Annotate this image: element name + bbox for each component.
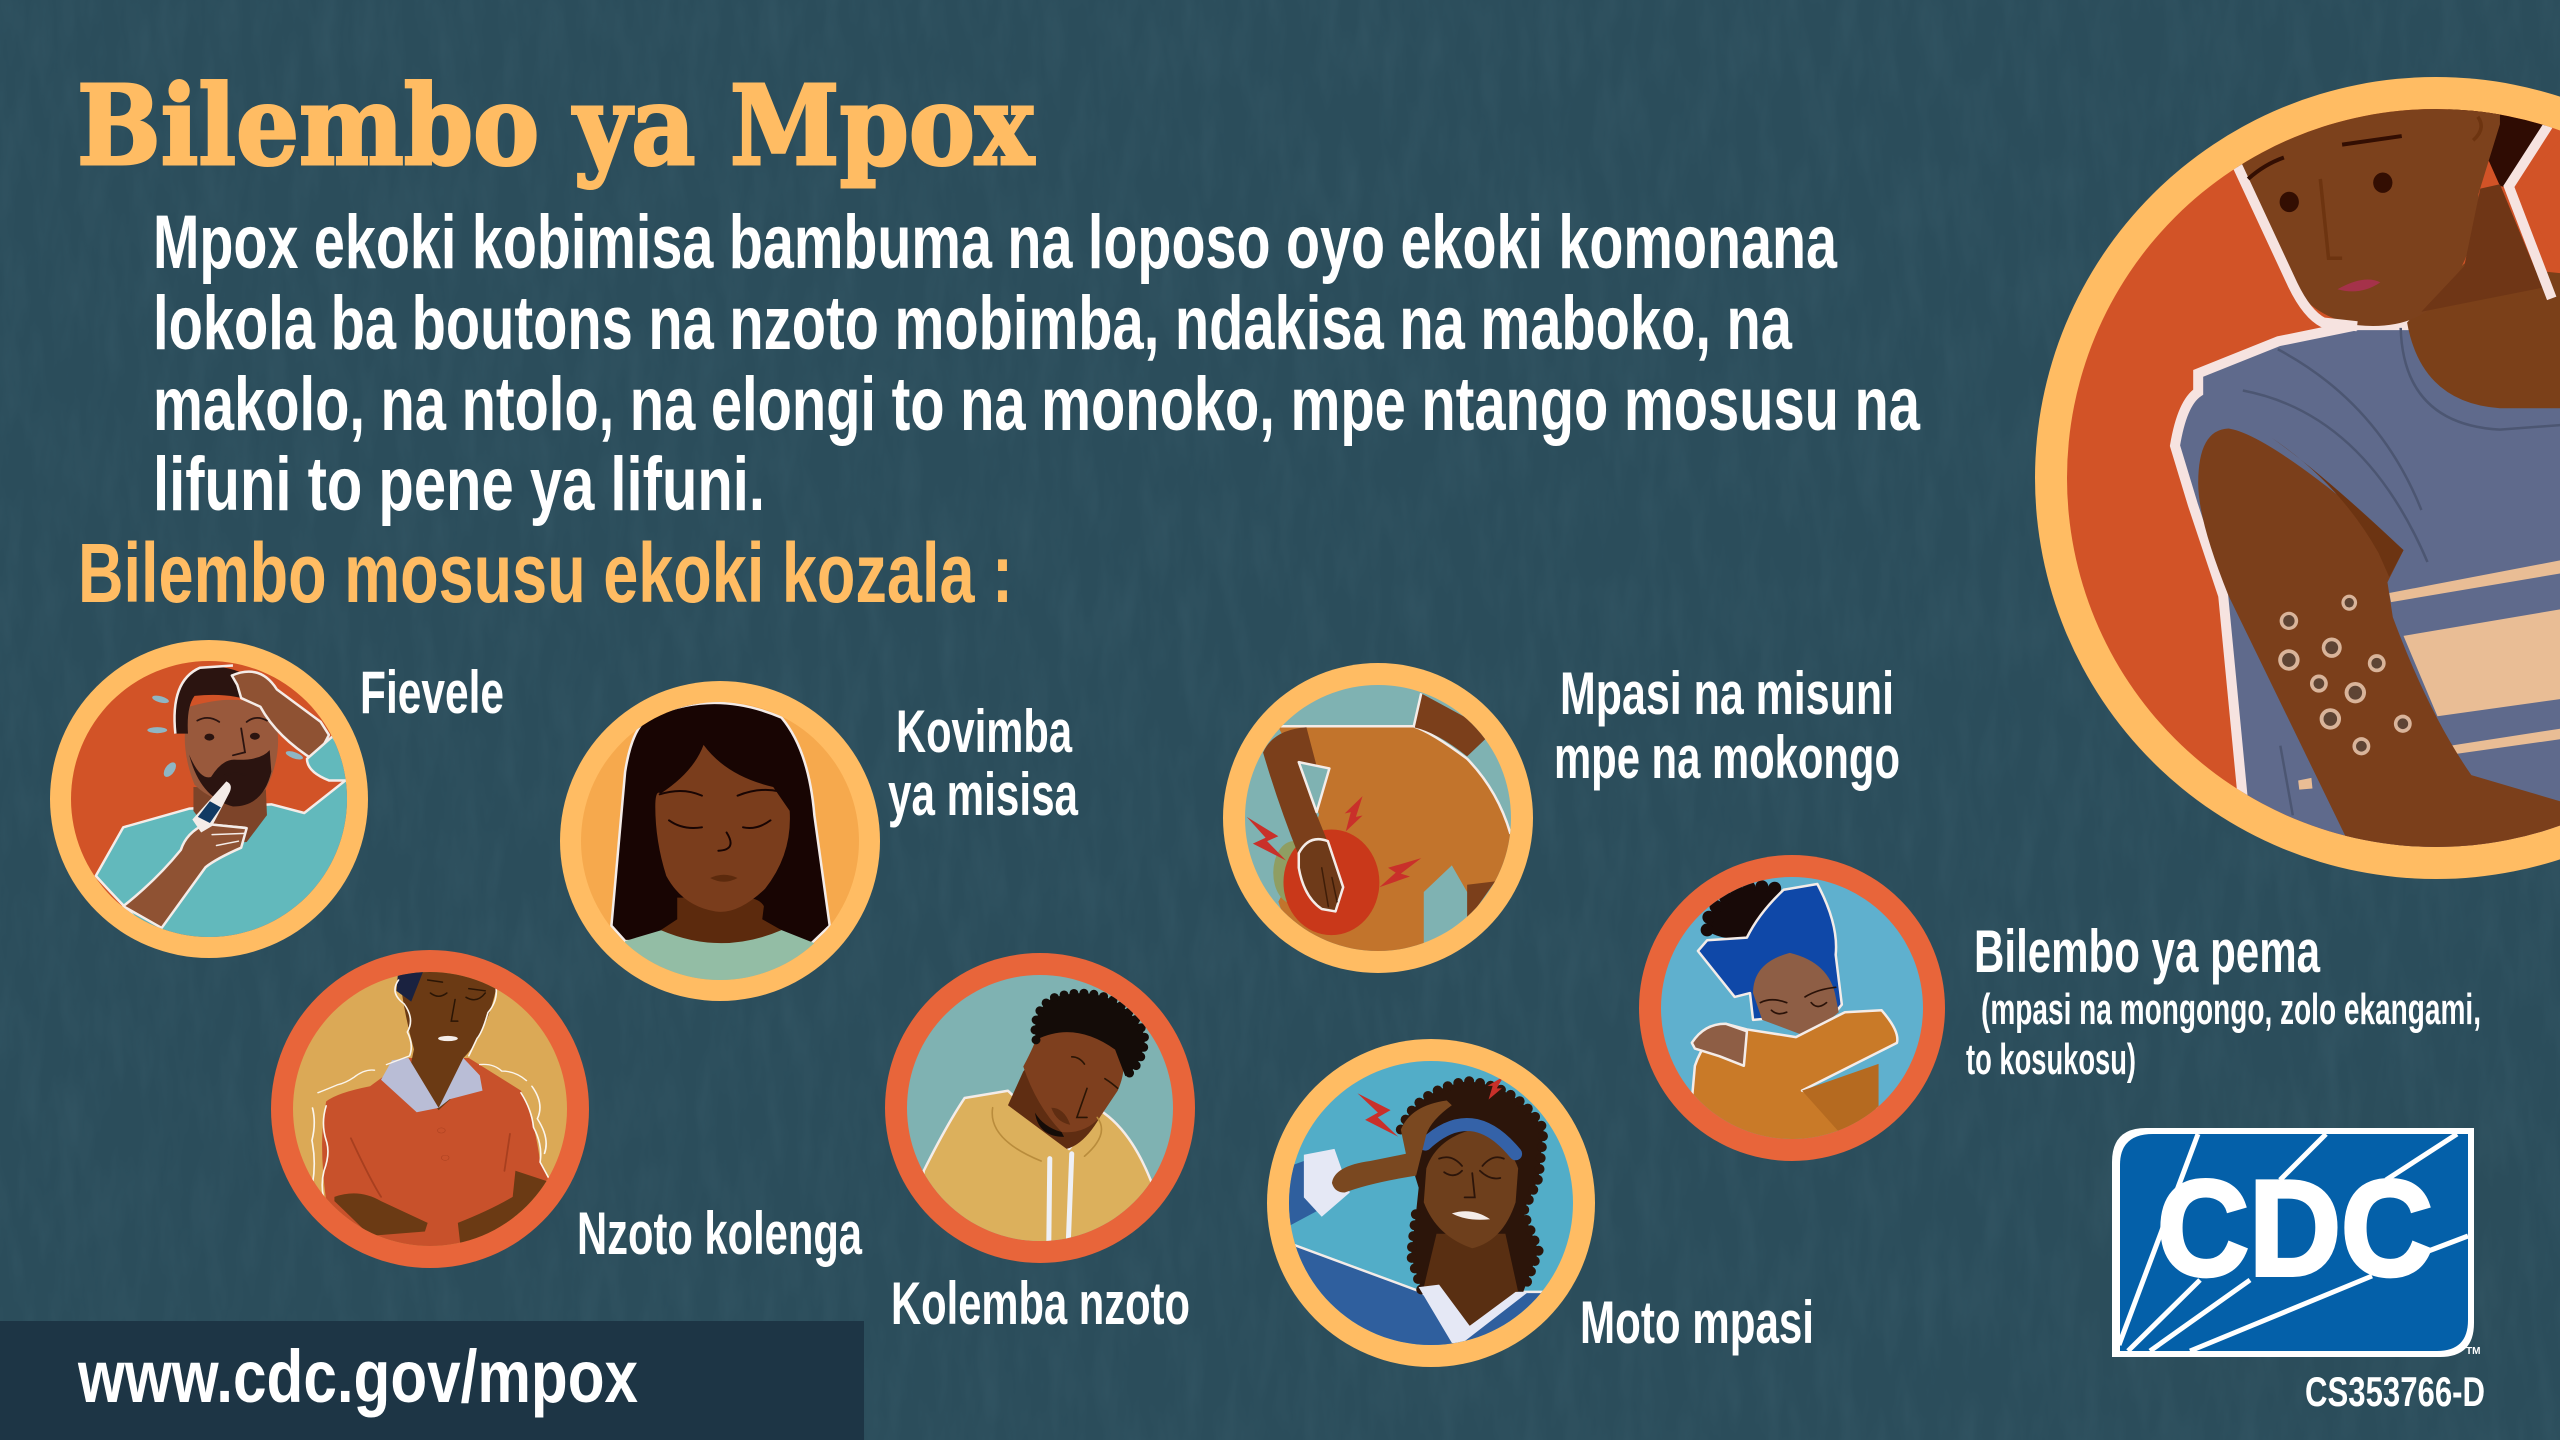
hair: [2448, 109, 2546, 187]
hand: [1299, 839, 1343, 911]
label: respiratory symptoms: [1966, 918, 2481, 1084]
label: exhaustion: Kolemba nzoto: [891, 1270, 1190, 1337]
subheading: Bilembo mosusu ekoki kozala :: [78, 526, 1013, 620]
face: [2237, 109, 2500, 326]
logo: CDC: TM: [2466, 1346, 2480, 1357]
intro paragraph: makolo, na ntolo, na elongi to na monoko, mpe ntango mosusu na: [153, 362, 1921, 447]
illustration: headache: [1267, 1039, 1595, 1377]
illustration: muscle and back pain: [1223, 663, 1533, 973]
illustration: chills: [271, 950, 589, 1268]
arm: [1263, 727, 1328, 856]
illustration: respiratory symptoms: [1639, 855, 1945, 1161]
illustration: exhaustion: [885, 953, 1195, 1263]
label: respiratory symptoms: Bilembo ya pema: [1974, 918, 2320, 985]
label: respiratory symptoms: to kosukosu): [1966, 1035, 2136, 1084]
illustration: person with rash on arm: [2035, 77, 2560, 879]
intro paragraph: [153, 200, 1921, 527]
thermometer: [192, 781, 231, 833]
intro paragraph: lokola ba boutons na nzoto mobimba, ndakisa na maboko, na: [153, 281, 1793, 366]
arm: [2198, 429, 2560, 864]
head outline: [2237, 166, 2357, 326]
logo: CDC: CDC: [2157, 1152, 2433, 1304]
label: headache: Moto mpasi: [1580, 1289, 1814, 1356]
illustration: swollen lymph nodes: [560, 681, 880, 1001]
facial features: [2280, 192, 2299, 212]
shirt folds: [2243, 328, 2560, 815]
label: fever: Fievele: [360, 659, 504, 726]
rash bumps: [2278, 595, 2412, 755]
neck: [2407, 264, 2560, 408]
label: swollen lymph nodes: Kovimba: [896, 698, 1072, 765]
intro paragraph: lifuni to pene ya lifuni.: [153, 442, 765, 527]
label: muscle and back pain: mpe na mokongo: [1554, 724, 1900, 791]
shirt: [2175, 325, 2560, 864]
logo: CDC: [2112, 1128, 2480, 1357]
publication code: CS353766-D: [2305, 1368, 2485, 1415]
stripes: [2298, 558, 2560, 790]
label: swollen lymph nodes: ya misisa: [888, 761, 1078, 828]
title: Bilembo ya Mpox: [77, 61, 1035, 190]
illustration: fever: [50, 640, 370, 976]
footer band with URL: www.cdc.gov/mpox: [77, 1335, 638, 1418]
label: chills: Nzoto kolenga: [577, 1200, 862, 1267]
footer band with URL: [0, 1321, 864, 1440]
label: muscle and back pain: Mpasi na misuni: [1560, 660, 1894, 727]
label: swollen lymph nodes: [888, 698, 1078, 828]
intro paragraph: Mpox ekoki kobimisa bambuma na loposo oyo ekoki komonana: [153, 200, 1838, 285]
label: muscle and back pain: [1554, 660, 1900, 791]
